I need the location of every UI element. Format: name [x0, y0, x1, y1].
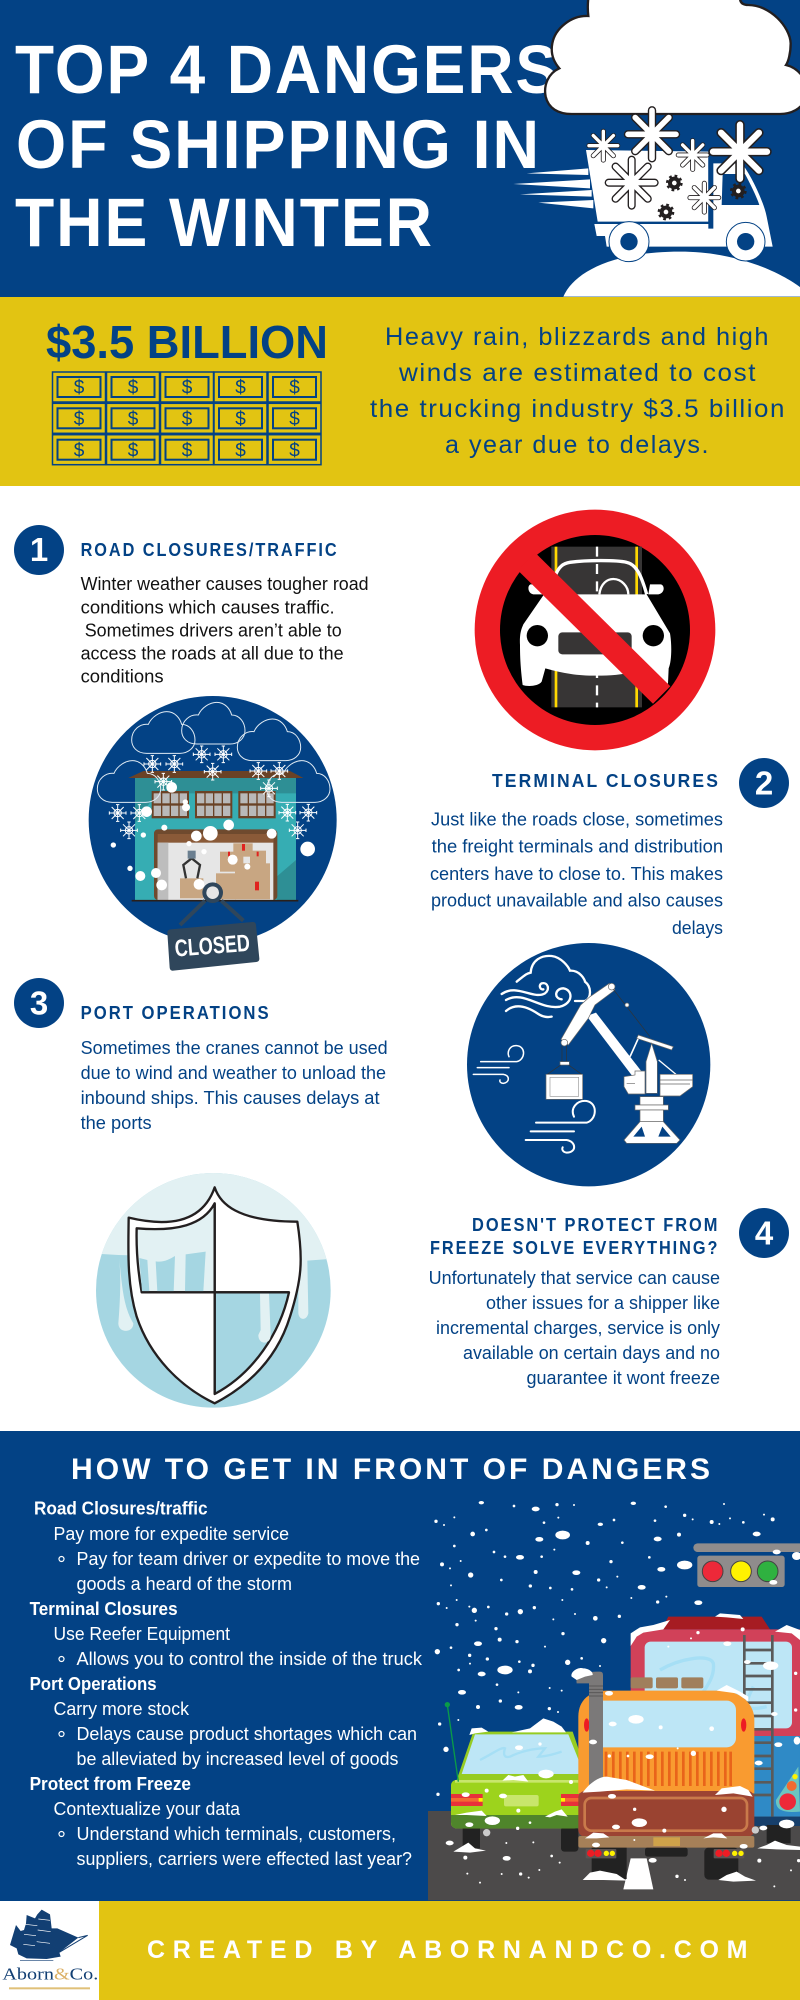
snowflakes	[109, 746, 317, 839]
panel: danger 4 freeze	[429, 1208, 789, 1388]
vehicle: orange truck	[576, 1672, 754, 1880]
text block: port operations: the ports	[81, 1112, 152, 1133]
logo: Aborn and Co	[2, 1910, 98, 1989]
badge: number 2	[739, 758, 789, 808]
list: protect from freeze tips: suppliers, carriers were effected last year?	[76, 1848, 412, 1869]
heading: terminal closures: TERMINAL CLOSURES	[492, 771, 720, 791]
icon: grid of dollar bills: $	[289, 378, 300, 398]
badge: number 2: 2	[755, 764, 773, 802]
text block: cost description: winds are estimated to cost	[398, 359, 757, 387]
heading: protect from freeze: DOESN'T PROTECT FROM	[472, 1215, 719, 1235]
panel: danger 1 road closures	[14, 525, 369, 686]
shield	[128, 1187, 301, 1403]
heading: port operations: PORT OPERATIONS	[81, 1003, 271, 1023]
icon: grid of dollar bills: $	[128, 409, 139, 430]
icon: grid of dollar bills: $	[289, 409, 300, 430]
list: terminal closures tips: Allows you to control the inside of the truck	[76, 1648, 423, 1669]
list: road closures tips: Pay more for expedite service	[54, 1523, 289, 1544]
snow clouds	[97, 702, 330, 802]
badge: number 1: 1	[30, 531, 48, 568]
panel: footer	[0, 1901, 800, 2000]
icon: no cars sign	[475, 510, 715, 750]
text block: protect from freeze: Unfortunately that service can cause	[429, 1267, 720, 1288]
falling snow	[434, 1501, 800, 1887]
text block: terminal closures: product unavailable and also causes	[431, 890, 723, 911]
panel: cost banner	[0, 297, 800, 486]
heading: protect from freeze: FREEZE SOLVE EVERYTHING?	[430, 1238, 719, 1258]
icon: grid of dollar bills: $	[74, 409, 85, 430]
road	[428, 1811, 800, 1900]
text block: road closures	[81, 573, 369, 686]
vehicle: green car	[445, 1702, 580, 1852]
icon: storm cloud	[545, 0, 800, 114]
text block: port operations: Sometimes the cranes cannot be used	[81, 1037, 388, 1058]
text block: protect from freeze: incremental charges, service is only	[436, 1317, 721, 1338]
icon: delivery truck	[513, 150, 773, 262]
text block: terminal closures	[430, 809, 723, 938]
icon: grid of dollar bills: $	[182, 409, 193, 430]
icon: grid of dollar bills: $	[235, 409, 246, 430]
text block: port operations	[81, 1037, 388, 1133]
list: port operations tips: Carry more stock	[54, 1698, 190, 1719]
icon: grid of dollar bills: $	[74, 378, 85, 398]
list: protect from freeze tips: Understand which terminals, customers,	[76, 1823, 396, 1844]
icon: grid of dollar bills: $	[182, 378, 193, 398]
title: TOP 4 DANGERS	[15, 31, 560, 108]
heading: protect from freeze	[430, 1215, 719, 1258]
badge: number 4: 4	[755, 1214, 774, 1252]
heading: $3.5 billion: $3.5 BILLION	[46, 316, 328, 368]
badge: number 1	[14, 525, 64, 575]
icon: snowflakes	[589, 110, 767, 219]
text block: protect from freeze: available on certain days and no	[463, 1342, 720, 1363]
text block: cost description: the trucking industry $3.5 billion	[370, 395, 786, 423]
list: port operations tips: be alleviated by increased level of goods	[76, 1748, 398, 1769]
icon: cloud, snow and delivery truck	[513, 0, 800, 297]
text block: protect from freeze: guarantee it wont freeze	[526, 1367, 720, 1388]
text block: cost description: Heavy rain, blizzards and high	[385, 323, 770, 351]
lane marking	[623, 1858, 653, 1889]
closed sign: CLOSED	[174, 930, 251, 963]
text block: cost description	[370, 323, 786, 459]
closed sign	[167, 884, 259, 971]
title	[15, 31, 560, 261]
panel: danger 2 terminal closures	[430, 758, 789, 938]
badge: number 3	[14, 978, 64, 1028]
text block: port operations: due to wind and weather to unload the	[81, 1062, 386, 1083]
wind and cloud	[473, 956, 595, 1153]
text block: road closures: Winter weather causes tougher road	[81, 573, 369, 594]
text block: terminal closures: delays	[672, 917, 723, 938]
list: road closures tips: goods a heard of the storm	[76, 1573, 292, 1594]
icon: grid of dollar bills: $	[235, 440, 246, 461]
icon: car	[520, 561, 671, 686]
icon: ship	[10, 1910, 88, 1961]
list: port operations tips: Delays cause product shortages which can	[76, 1723, 417, 1744]
list: protect from freeze tips: Contextualize your data	[54, 1798, 241, 1819]
icon: grid of dollar bills	[52, 372, 321, 465]
icon: grid of dollar bills: $	[74, 440, 85, 461]
boxes and robotic claw	[180, 843, 270, 899]
icon: grid of dollar bills: $	[289, 440, 300, 461]
heading: how to get in front of dangers: HOW TO GET IN FRONT OF DANGERS	[71, 1453, 713, 1486]
title: OF SHIPPING IN	[16, 106, 541, 183]
logo wordmark: Aborn&Co.	[2, 1965, 98, 1984]
list: road closures tips	[34, 1498, 420, 1594]
heading: road closures: ROAD CLOSURES/TRAFFIC	[81, 540, 339, 560]
text block: road closures: conditions which causes traffic.	[81, 596, 335, 617]
badge: number 4	[739, 1208, 789, 1258]
text block: terminal closures: centers have to close to. This makes	[430, 863, 723, 884]
panel: header background	[0, 0, 800, 297]
list: road closures tips: Road Closures/traffic	[34, 1498, 208, 1519]
crane	[546, 983, 693, 1143]
icon: grid of dollar bills: $	[128, 440, 139, 461]
illustration: closed warehouse in snow	[89, 696, 337, 971]
vehicle: bus	[631, 1617, 800, 1843]
road	[551, 547, 642, 707]
list: port operations tips	[30, 1673, 417, 1769]
text block: terminal closures: Just like the roads close, sometimes	[431, 809, 723, 830]
illustration: port crane in wind	[467, 943, 710, 1186]
list: protect from freeze tips	[30, 1773, 412, 1869]
list: protect from freeze tips: Protect from Freeze	[30, 1773, 191, 1794]
panel: how to get in front of dangers	[0, 1431, 800, 1901]
list: terminal closures tips: Terminal Closures	[30, 1598, 178, 1619]
list: terminal closures tips	[30, 1598, 423, 1669]
title: THE WINTER	[15, 184, 434, 261]
text block: road closures: access the roads at all due to the	[81, 642, 344, 663]
traffic light	[693, 1543, 800, 1587]
icon: grid of dollar bills: $	[182, 440, 193, 461]
panel: danger 3 port operations	[14, 978, 388, 1133]
text block: cost description: a year due to delays.	[445, 431, 710, 459]
illustration: shield with ice	[90, 1170, 343, 1408]
badge: number 3: 3	[30, 984, 48, 1022]
icon: snow hill	[563, 252, 800, 297]
ice drips	[102, 1173, 326, 1331]
list: road closures tips: Pay for team driver or expedite to move the	[76, 1548, 420, 1569]
list: port operations tips: Port Operations	[30, 1673, 157, 1694]
icon: grid of dollar bills: $	[235, 378, 246, 398]
text block: protect from freeze	[429, 1267, 721, 1388]
text block: road closures: Sometimes drivers aren’t able to	[85, 619, 342, 640]
snow piles	[453, 1613, 800, 1882]
illustration: snowy traffic jam	[428, 1501, 800, 1900]
building	[128, 771, 303, 901]
icon: grid of dollar bills: $	[128, 378, 139, 398]
text block: port operations: inbound ships. This causes delays at	[81, 1087, 380, 1108]
text block: protect from freeze: other issues for a shipper like	[486, 1292, 720, 1313]
text block: road closures: conditions	[81, 665, 164, 686]
text block: terminal closures: the freight terminals and distribution	[432, 836, 723, 857]
list: terminal closures tips: Use Reefer Equipment	[54, 1623, 230, 1644]
footer credit: CREATED BY ABORNANDCO.COM	[147, 1936, 748, 1964]
